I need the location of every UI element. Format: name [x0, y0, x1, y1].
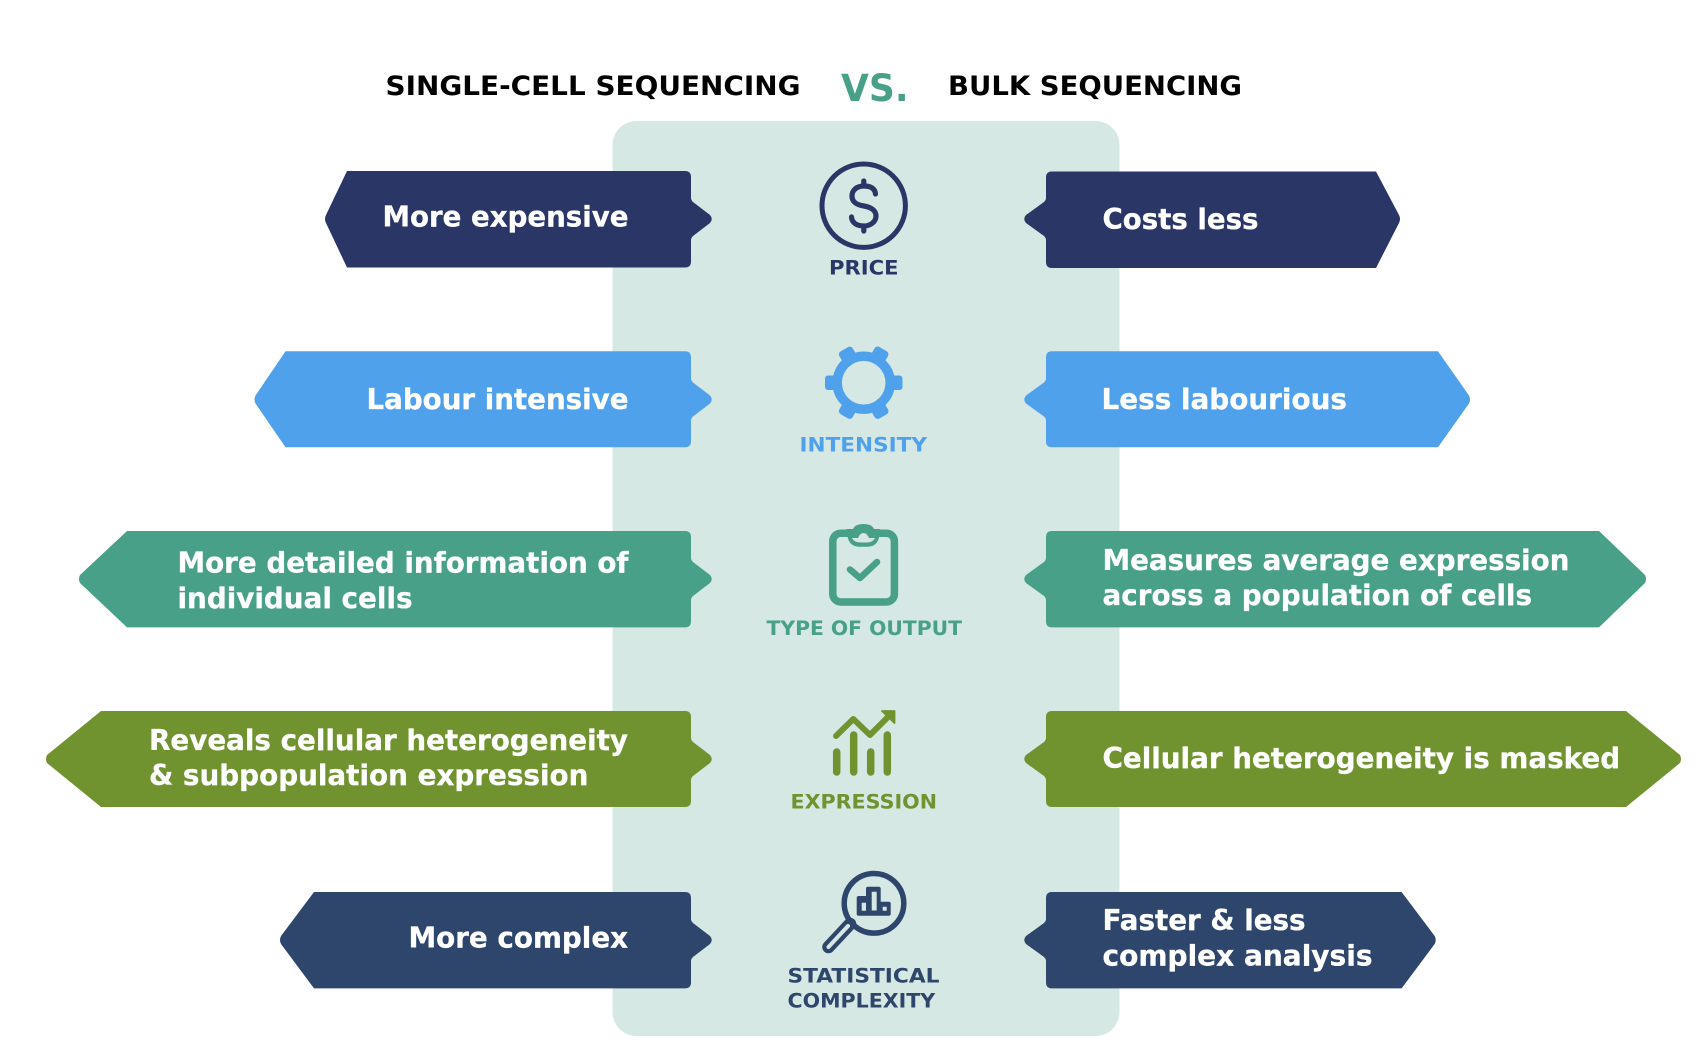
label: price: PRICE — [829, 256, 898, 279]
title: bulk sequencing: BULK SEQUENCING — [948, 71, 1242, 102]
row 4 right: cellular heterogeneity is masked: Cellular heterogeneity is masked — [1102, 742, 1620, 775]
row 5 right: faster and less complex analysis: Faster & less — [1102, 904, 1306, 937]
row 1 left: more expensive: More expensive — [382, 201, 628, 234]
icon: gear — [825, 345, 902, 420]
panel: central categories — [612, 121, 1120, 1036]
row 1 left: more expensive — [325, 171, 712, 268]
row 5 right: faster and less complex analysis — [1024, 892, 1436, 988]
row 2 left: labour intensive — [254, 351, 712, 447]
row 4 left: reveals cellular heterogeneity: & subpopulation expression — [149, 759, 588, 792]
row 2 left: labour intensive: Labour intensive — [366, 383, 628, 416]
label: intensity: INTENSITY — [800, 434, 928, 457]
row 4 left: reveals cellular heterogeneity: Reveals cellular heterogeneity — [149, 724, 628, 757]
row 4 right: cellular heterogeneity is masked — [1024, 711, 1681, 807]
label: statistical complexity — [788, 965, 940, 1012]
row 3 left: more detailed information: individual cells — [178, 582, 412, 615]
row 5 left: more complex: More complex — [408, 922, 628, 955]
row 3 right: measures average expression: Measures average expression — [1102, 544, 1570, 577]
row 5 right: faster and less complex analysis: complex analysis — [1102, 939, 1372, 972]
row 4 left: reveals cellular heterogeneity — [46, 711, 712, 807]
row 3 right: measures average expression: across a population of cells — [1102, 579, 1532, 612]
icon: growth chart — [836, 711, 894, 772]
title: vs.: VS. — [841, 67, 908, 110]
label: type of output: TYPE OF OUTPUT — [766, 617, 963, 640]
label: expression: EXPRESSION — [790, 790, 937, 813]
row 1 right: costs less: Costs less — [1102, 203, 1258, 236]
label: statistical complexity: STATISTICAL — [788, 965, 940, 988]
icon: magnifier with bar chart — [828, 874, 904, 947]
icon: clipboard with check — [833, 524, 894, 602]
row 5 left: more complex — [280, 892, 712, 988]
row 2 right: less labourious — [1024, 351, 1470, 447]
row 3 left: more detailed information — [79, 531, 712, 627]
row 3 left: more detailed information: More detailed information of — [178, 546, 629, 580]
row 1 right: costs less — [1024, 172, 1400, 268]
row 3 right: measures average expression — [1024, 531, 1646, 627]
label: statistical complexity: COMPLEXITY — [788, 989, 936, 1012]
row 2 right: less labourious: Less labourious — [1102, 383, 1347, 416]
title: single-cell sequencing: SINGLE-CELL SEQUENCING — [386, 71, 800, 102]
icon: dollar coin — [822, 164, 905, 247]
